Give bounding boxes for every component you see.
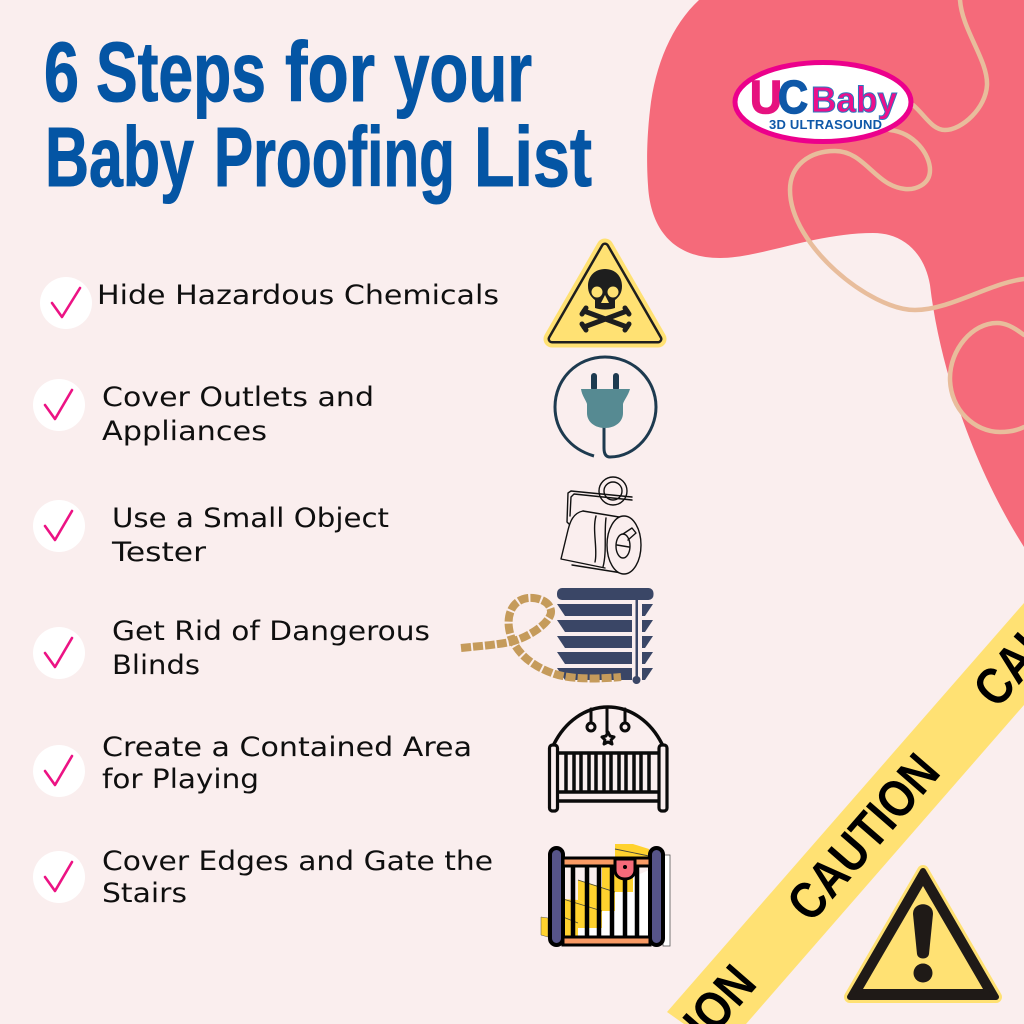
step 1: hide hazardous chemicals: Hide Hazardous Chemicals — [97, 280, 499, 311]
icon: electric plug — [555, 357, 656, 457]
pink blob background — [647, 0, 1024, 547]
step 4: dangerous blinds: Blinds — [112, 650, 200, 681]
icon: skull warning triangle — [552, 247, 658, 339]
logo: UC Baby 3D Ultrasound — [735, 62, 911, 142]
step 6: edges and stairs — [33, 846, 493, 909]
step 3: small object tester: Tester — [111, 537, 207, 568]
step 2: cover outlets: Cover Outlets and — [102, 382, 374, 413]
title: Baby — [45, 110, 194, 204]
decorative tan curves — [790, 0, 1024, 432]
step 5: contained play area: Create a Contained Area — [102, 732, 472, 763]
step 3: small object tester: Use a Small Object — [112, 503, 389, 534]
step 3: small object tester — [33, 500, 389, 568]
step 4: dangerous blinds: Get Rid of Dangerous — [112, 616, 430, 647]
step 5: contained play area: for Playing — [102, 764, 259, 795]
logo: UC Baby 3D Ultrasound: C — [778, 71, 808, 123]
caution tape — [667, 603, 1024, 1024]
title — [44, 25, 592, 204]
step 2: cover outlets: Appliances — [102, 416, 267, 447]
icon: baby crib — [550, 707, 667, 811]
step 2: cover outlets — [33, 379, 374, 447]
logo: UC Baby 3D Ultrasound: U — [750, 71, 782, 123]
title: 6 — [44, 25, 79, 119]
icon: exclamation warning triangle — [850, 871, 996, 997]
title: List — [474, 110, 592, 204]
logo: UC Baby 3D Ultrasound: Baby — [811, 79, 897, 120]
caution tape: CAUTION — [776, 743, 951, 932]
icon: stair gate — [541, 844, 670, 946]
step 6: edges and stairs: Cover Edges and Gate the — [102, 846, 493, 877]
step 1: hide hazardous chemicals — [40, 277, 499, 329]
title: Steps — [96, 25, 266, 119]
title: your — [394, 25, 532, 119]
step 4: dangerous blinds — [33, 616, 430, 681]
icon: window blinds with cord — [461, 588, 654, 684]
title: for — [285, 25, 375, 119]
icon: toilet paper roll — [561, 477, 641, 574]
logo: UC Baby 3D Ultrasound: 3D ULTRASOUND — [769, 117, 882, 132]
step 5: contained play area — [33, 732, 472, 797]
step 6: edges and stairs: Stairs — [102, 878, 187, 909]
title: Proofing — [214, 110, 455, 204]
